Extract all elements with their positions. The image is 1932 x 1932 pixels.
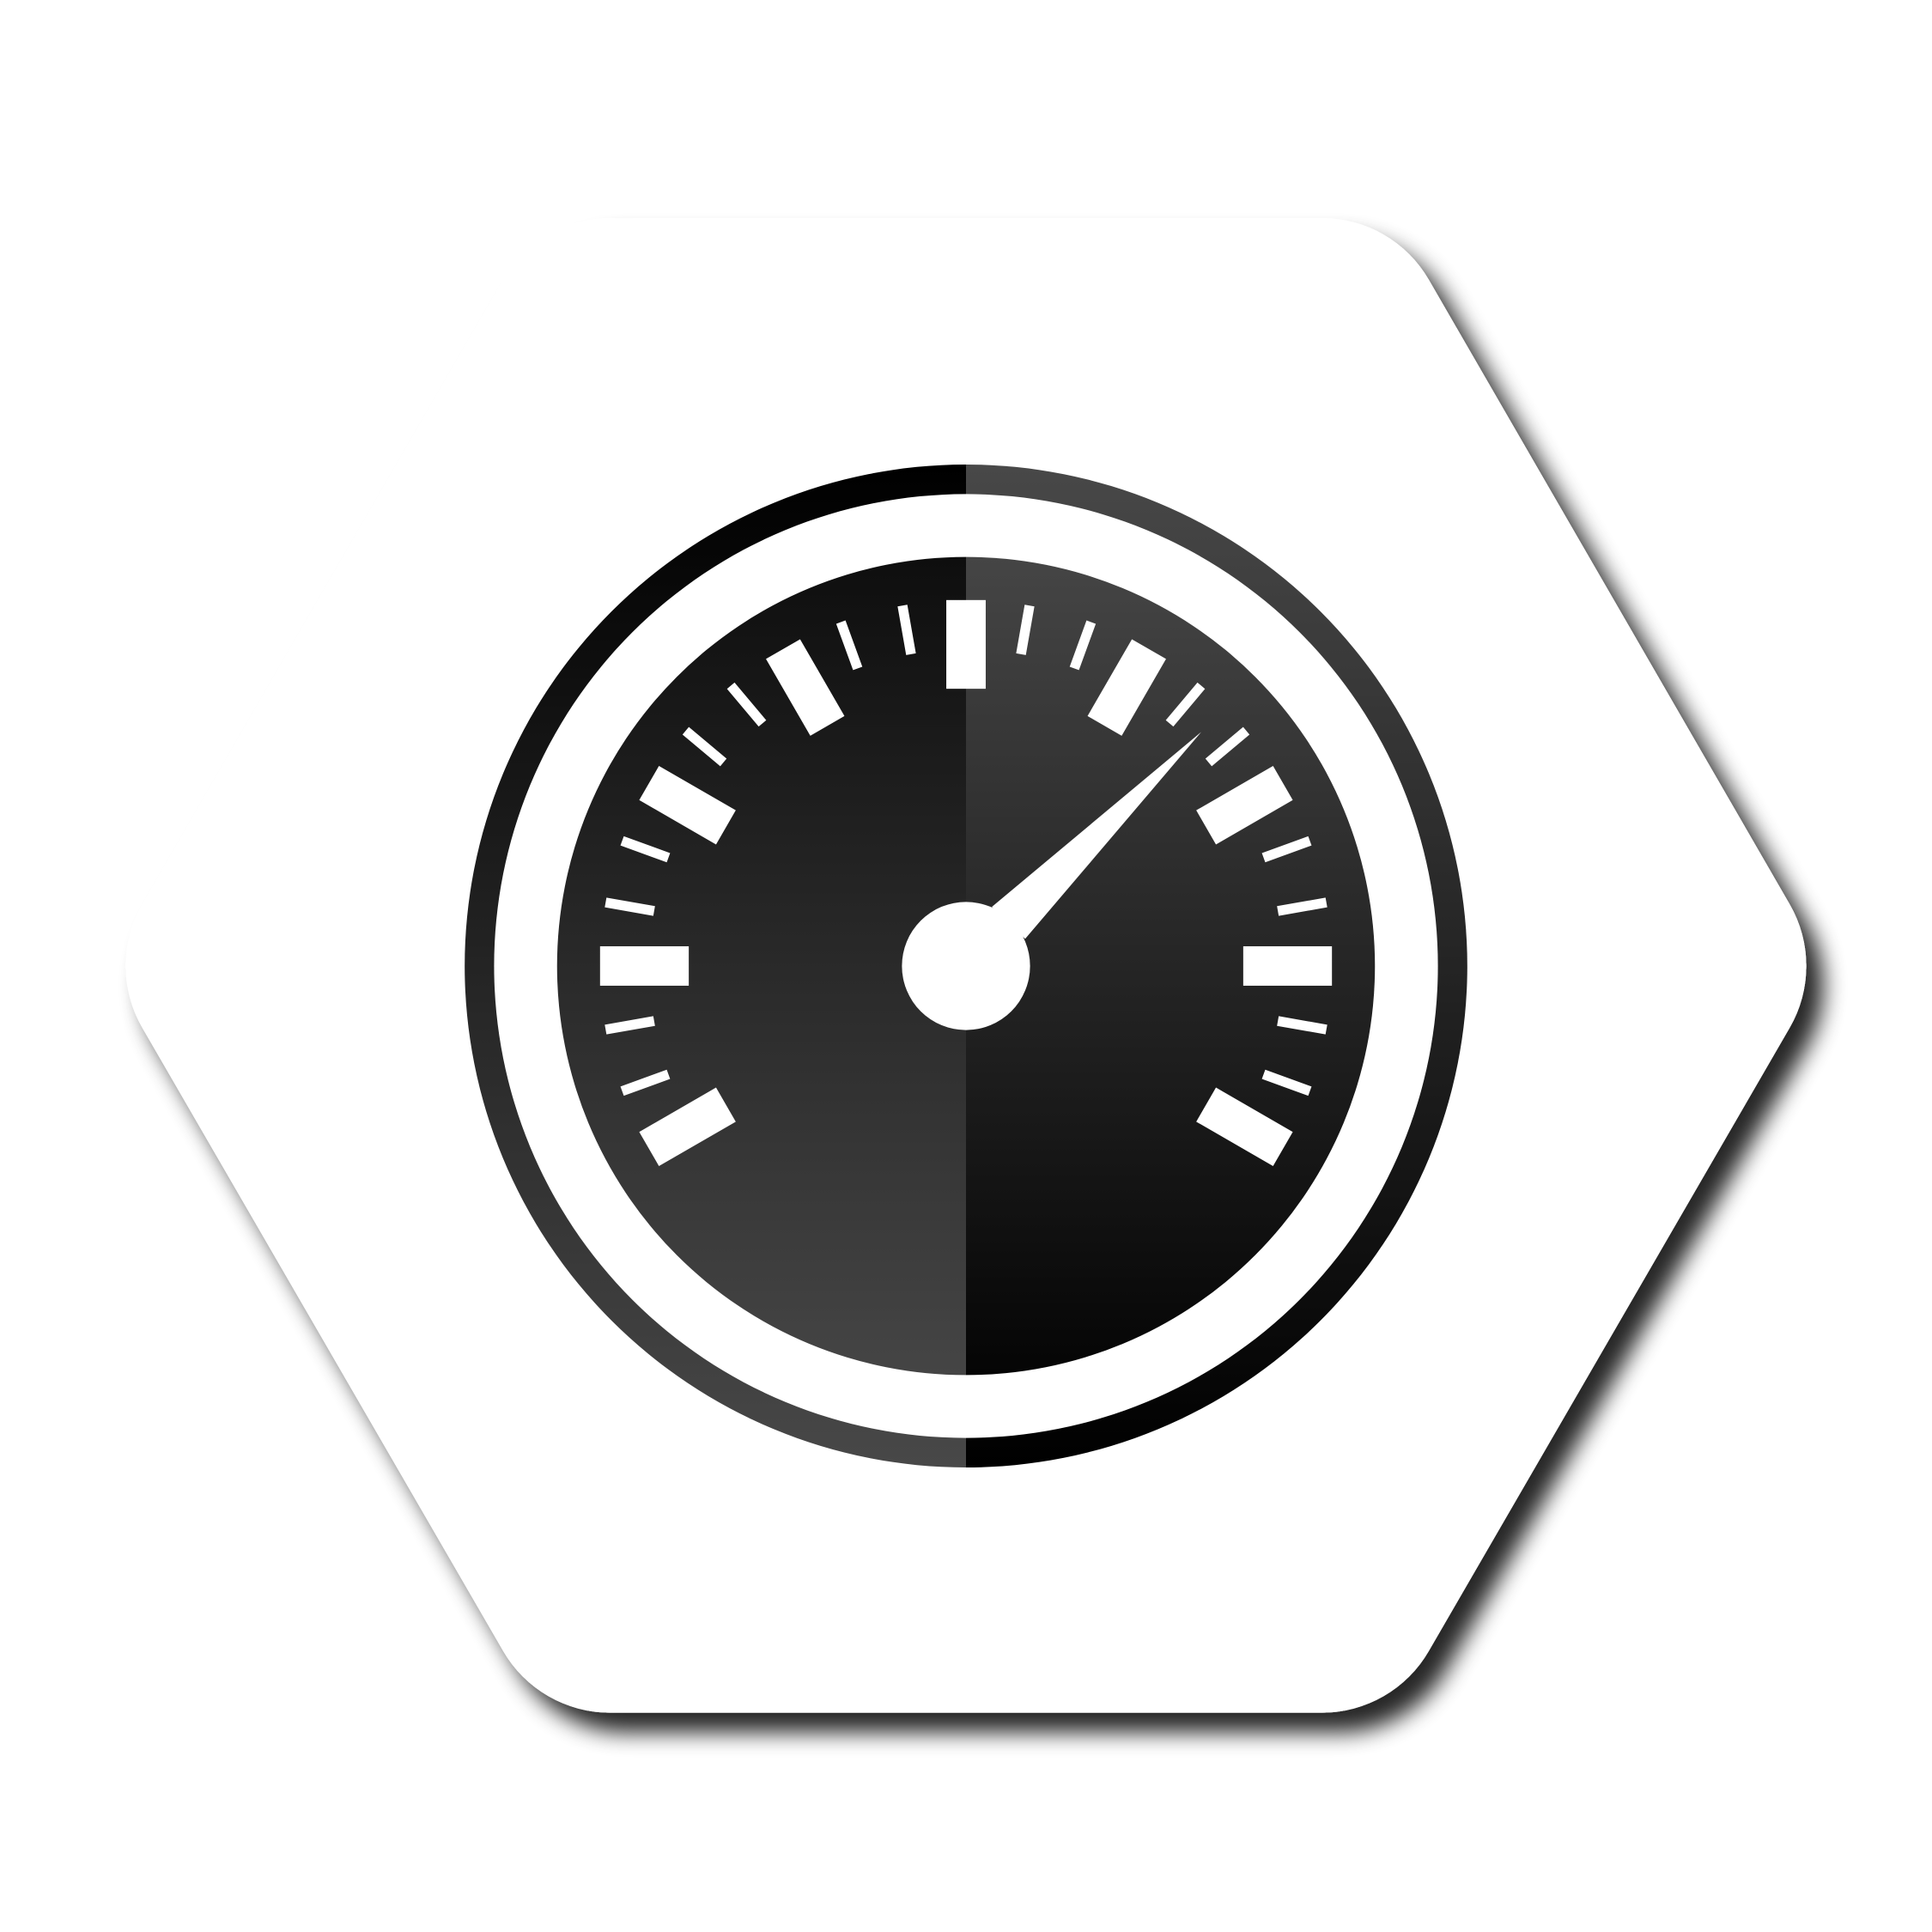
dial face bbox=[557, 557, 1375, 1375]
tick marks bbox=[600, 600, 1332, 1166]
gauge icon bbox=[465, 465, 1467, 1467]
needle bbox=[902, 732, 1201, 1030]
outer ring bbox=[465, 465, 1467, 1467]
hexagon background bbox=[249, 341, 1683, 1589]
